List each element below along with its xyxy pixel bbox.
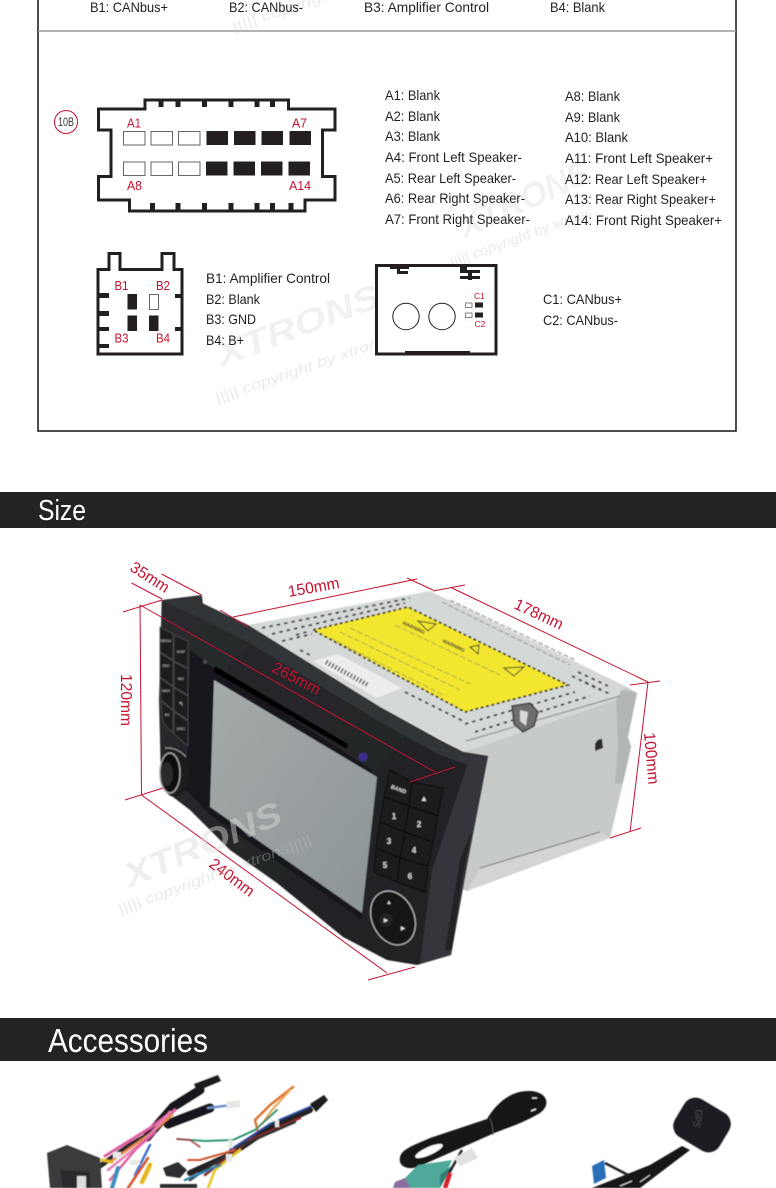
text: C1 and C2 pin list: C2: CANbus-	[543, 312, 618, 328]
accessory: antenna cable coil	[393, 1091, 546, 1188]
front bezel: 4	[412, 846, 417, 855]
right buttons	[374, 770, 443, 892]
text: A1 to A7 pin list: A4: Front Left Speaker-	[385, 149, 522, 165]
front bezel: ▶	[384, 918, 389, 924]
front bezel: ▶	[401, 926, 406, 932]
front bezel: ↰	[178, 701, 184, 708]
watermark on device: ||||| copyright by xtrons|||||	[116, 832, 314, 917]
heading: Accessories	[0, 1018, 776, 1061]
connector diagram: B block	[97, 254, 182, 354]
watermarks on wiring panel: XTRONS	[209, 277, 386, 375]
front bezel: ▲	[386, 900, 392, 906]
device photo: car stereo with dimensions	[116, 559, 661, 980]
connector diagram: B block: B4	[156, 332, 170, 346]
front bezel: 2	[417, 820, 422, 829]
icon: 10B circled label	[54, 110, 78, 134]
connector diagram: B block: B3	[114, 332, 129, 346]
front bezel: 6	[408, 872, 413, 881]
front bezel: NAVI	[162, 689, 170, 693]
connector diagram: A block: A1	[127, 116, 141, 130]
connector diagram: A block: A8	[127, 179, 142, 193]
text: A8 to A14 pin list: A13: Rear Right Speaker+	[565, 191, 716, 207]
text: A1 to A7 pin list: A2: Blank	[385, 108, 441, 124]
text: B1 to B4 pin list: B2: Blank	[206, 291, 261, 307]
chassis: WARNING	[441, 638, 466, 654]
front bezel: DISP	[177, 650, 186, 654]
text: A1 to A7 pin list: A3: Blank	[385, 128, 441, 144]
text: C1 and C2 pin list: C1: CANbus+	[543, 291, 622, 307]
text: A8 to A14 pin list: A12: Rear Left Speaker+	[565, 171, 707, 187]
text: A8 to A14 pin list: A10: Blank	[565, 129, 629, 145]
text: A1 to A7 pin list: A7: Front Right Speaker-	[385, 211, 530, 227]
round controller	[362, 884, 424, 952]
dimension labels: 178mm	[511, 596, 566, 634]
connector diagram: C block: C2	[474, 319, 486, 329]
text: A1 to A7 pin list: A5: Rear Left Speaker-	[385, 170, 516, 186]
dimension labels: 150mm	[287, 575, 341, 601]
chassis	[248, 591, 637, 891]
dimension lines	[123, 574, 660, 980]
dimension labels: 265mm	[269, 660, 323, 699]
text: B1 to B4 pin list: B4: B+	[206, 332, 244, 348]
text: A1 to A7 pin list: A6: Rear Right Speaker-	[385, 190, 525, 206]
text: A1 to A7 pin list: A1: Blank	[385, 87, 441, 103]
left buttons	[160, 627, 188, 746]
text: C1 and C2 pin list	[543, 291, 622, 328]
text: B1 to B4 pin list: B3: GND	[206, 311, 256, 327]
icon: 10B circled label: 10B	[58, 117, 74, 129]
panel: wiring diagrams frame	[38, 0, 736, 431]
connector diagram: A block	[98, 100, 335, 211]
connector diagram: C block	[376, 266, 496, 355]
heading: Accessories: Accessories	[48, 1022, 208, 1059]
heading: Size	[0, 492, 776, 528]
watermarks on wiring panel	[209, 0, 596, 406]
text: B1 to B4 pin list	[206, 270, 330, 348]
front bezel: MIC	[178, 677, 185, 681]
watermark on device: XTRONS	[116, 795, 288, 896]
dimension labels	[117, 559, 661, 900]
text: A1 to A7 pin list	[385, 87, 530, 227]
watermarks on wiring panel: ||||| copyright by xtrons	[448, 203, 594, 270]
text: top connector pin list	[90, 0, 606, 15]
heading: Size: Size	[38, 495, 86, 527]
front bezel	[159, 595, 488, 965]
front bezel: MENU	[161, 639, 172, 643]
front bezel: 3	[387, 837, 392, 846]
text: A8 to A14 pin list: A11: Front Left Speaker+	[565, 150, 713, 166]
text: B1 to B4 pin list: B1: Amplifier Control	[206, 270, 330, 286]
front bezel: 5	[383, 861, 388, 870]
watermark on device	[116, 795, 314, 917]
connector diagram: A block: A7	[292, 116, 307, 130]
connector diagram: C block: C1	[474, 291, 485, 301]
text: A8 to A14 pin list	[565, 88, 722, 228]
text: A8 to A14 pin list: A9: Blank	[565, 109, 621, 125]
connector diagram: B block: B2	[156, 279, 170, 293]
front bezel: AS	[165, 713, 170, 717]
front bezel: DISC	[177, 727, 186, 731]
connector diagram: A block: A14	[289, 179, 311, 193]
front bezel: SRC	[162, 664, 170, 668]
front bezel: ▲	[420, 794, 428, 803]
dimension labels: 240mm	[206, 856, 257, 900]
watermarks on wiring panel: ||||| copyright by xtrons|||||	[213, 324, 412, 406]
accessory: GPS antenna	[592, 1093, 736, 1188]
connector diagram: B block: B1	[114, 279, 129, 293]
accessory: GPS antenna: GPS	[690, 1108, 704, 1128]
watermarks on wiring panel: XTRONS	[451, 154, 596, 246]
chassis: WARNING	[401, 620, 426, 636]
front bezel: BAND	[390, 785, 407, 796]
front bezel: 1	[392, 812, 397, 821]
dimension labels: 35mm	[127, 559, 172, 597]
dimension labels: 100mm	[640, 732, 661, 785]
text: A8 to A14 pin list: A8: Blank	[565, 88, 621, 104]
text: A8 to A14 pin list: A14: Front Right Speaker+	[565, 212, 722, 228]
dimension labels: 120mm	[117, 674, 134, 726]
accessory: wiring harness	[47, 1075, 328, 1188]
